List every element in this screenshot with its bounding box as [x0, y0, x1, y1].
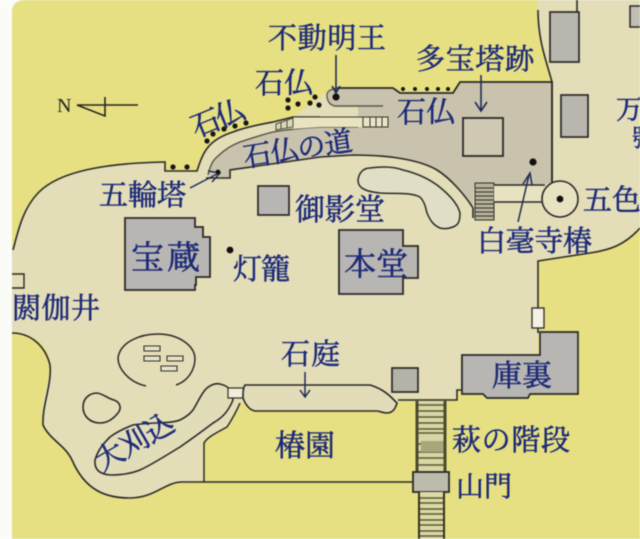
akai well box — [12, 274, 24, 288]
passage rails — [494, 185, 545, 202]
arrow to Byakugoji camellia — [518, 173, 532, 222]
label: main hall: 本堂 — [344, 246, 408, 282]
small square building — [392, 368, 418, 392]
building north-east far — [630, 6, 640, 27]
light strip below niche — [293, 117, 388, 129]
pale passage — [494, 185, 541, 202]
label: stone garden: 石庭 — [281, 338, 340, 371]
lantern dot — [227, 247, 233, 253]
grey approach path — [208, 82, 552, 208]
small steps west — [276, 118, 293, 130]
hedge side wall — [204, 403, 240, 482]
label: Tahoto site: 多宝塔跡 — [416, 43, 536, 76]
label: byakugoji camellia: 白毫寺椿 — [477, 225, 592, 258]
left lower boundary line — [12, 333, 415, 498]
niche outline — [327, 88, 383, 106]
path outline lower — [206, 155, 473, 218]
north letter: N — [57, 95, 71, 117]
north symbol — [77, 97, 138, 116]
right boundary wall — [538, 0, 640, 333]
stone path of the stone buddhas — [206, 82, 552, 218]
label: treasure house: 宝蔵 — [131, 240, 200, 277]
label: akai well: 閼伽井 — [12, 292, 100, 325]
label: sanmon: 山門 — [456, 472, 512, 503]
label: lantern: 灯籠 — [233, 253, 290, 286]
stone buddha dots east — [401, 87, 450, 91]
circle — [542, 181, 578, 217]
camellia marker dot — [529, 158, 537, 166]
rock garden stones — [144, 346, 183, 371]
arrow to gorinto — [190, 171, 220, 188]
label: kuri: 庫裏 — [492, 360, 552, 393]
stone buddha dots on slope — [204, 120, 249, 144]
label: gorinto: 五輪塔 — [99, 179, 186, 212]
hagi stairs lower — [419, 492, 444, 539]
gorinto dot — [216, 170, 220, 174]
small wall gate — [532, 308, 544, 328]
stone garden bed — [243, 385, 397, 413]
stone buddha dots at gap — [170, 164, 190, 170]
small steps — [363, 117, 388, 127]
Tahoto site foundation — [463, 118, 503, 156]
label: stone buddha north: 石仏 — [255, 68, 314, 100]
path inner curve — [208, 127, 358, 175]
center dot — [557, 196, 563, 202]
Fudo Myoo marker dot — [332, 93, 340, 101]
label: stone buddha east: 石仏 — [397, 97, 456, 129]
boundary by kuri — [398, 355, 462, 400]
camellia garden yellow plot — [204, 400, 416, 482]
top strip line — [293, 116, 388, 118]
outer boundary line — [13, 117, 320, 250]
north arrow — [57, 95, 138, 117]
building east — [561, 95, 588, 137]
sanmon gate — [413, 472, 449, 492]
label: goshiki: 五色 — [583, 184, 640, 217]
path outline top — [337, 82, 552, 183]
label: goeido: 御影堂 — [295, 194, 385, 227]
arrow to Fudo Myoo — [332, 55, 340, 93]
stone buddha dots near Fudo — [285, 94, 322, 111]
rock garden circle — [118, 334, 195, 386]
arrow to stone garden — [300, 372, 310, 397]
label: camellia garden: 椿園 — [275, 430, 335, 463]
okarikomi hedge — [95, 384, 233, 475]
hall stairs — [475, 183, 494, 220]
small gate — [228, 388, 245, 398]
main hall — [339, 230, 418, 294]
pale garden bed — [358, 167, 460, 229]
kuri building — [462, 332, 578, 398]
label: hagi stairs: 萩の階段 — [452, 424, 570, 457]
label: okarikomi: 大刈込 — [89, 406, 180, 478]
goeido hall — [258, 186, 289, 215]
goshiki camellia circle — [542, 181, 578, 217]
arrow to Tahoto site — [475, 75, 487, 111]
label: stone buddha path: 石仏の道 — [241, 125, 355, 174]
small pond — [83, 393, 120, 423]
building north-east large — [550, 12, 579, 62]
hagi stairs upper — [417, 401, 445, 472]
treasure house — [125, 218, 210, 290]
label: stone buddha slope: 石仏 — [187, 94, 251, 144]
label: Fudo Myoo: 不動明王 — [268, 22, 386, 55]
